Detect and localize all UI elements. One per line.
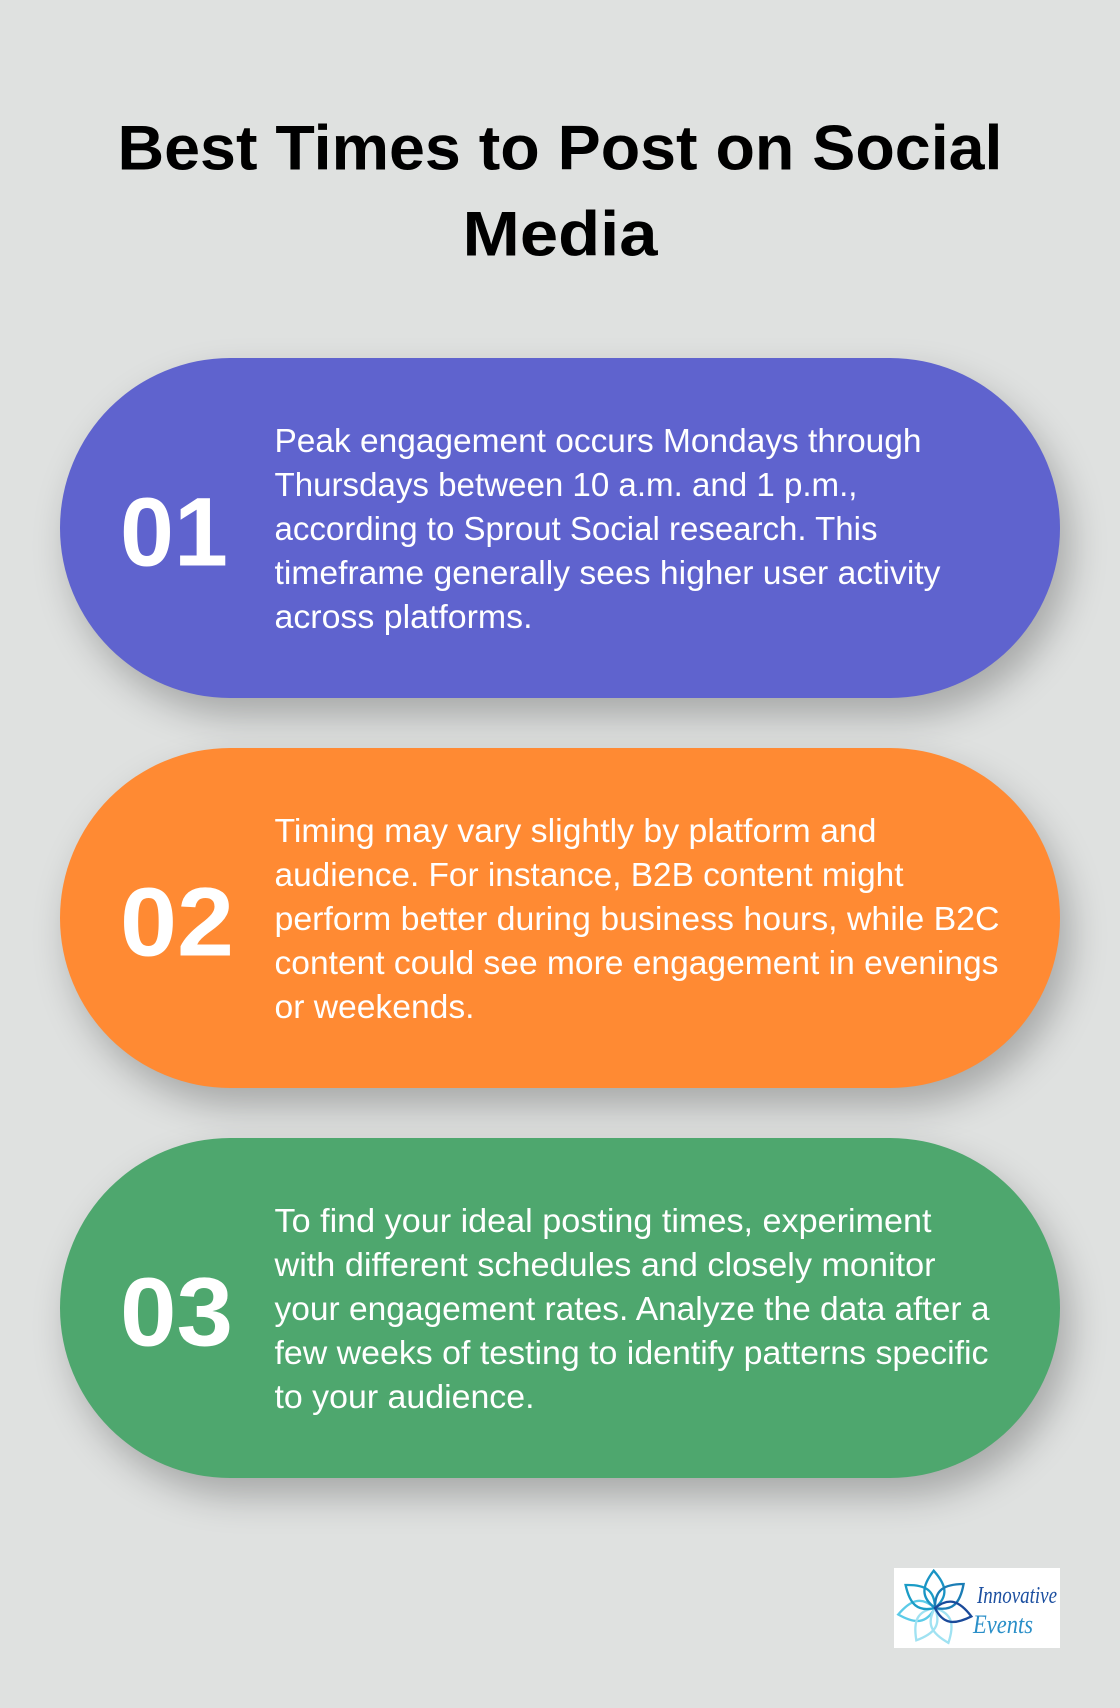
text block: step 03: To find your ideal posting times, experiment: [274, 1202, 932, 1239]
title: [118, 114, 1002, 270]
number 01: 01: [120, 478, 228, 586]
number 03: 03: [120, 1258, 233, 1366]
text block: step 01: Thursdays between 10 a.m. and 1 p.m.,: [274, 466, 858, 503]
text block: step 02: perform better during business hours, while B2C: [274, 900, 1000, 937]
text block: step 02: or weekends.: [274, 988, 474, 1025]
text block: step 03: few weeks of testing to identify patterns specific: [274, 1334, 988, 1371]
panel: step 01 peak engagement: [60, 358, 1060, 698]
text block: step 02: [274, 812, 1000, 1025]
icon: lotus flower: [897, 1570, 974, 1646]
logo wordmark: [972, 1583, 1057, 1639]
panel: step 03 find your ideal times: [60, 1138, 1060, 1478]
text block: step 02: Timing may vary slightly by platform and: [274, 812, 876, 849]
text block: step 03: [273, 1202, 990, 1415]
panel: step 02 timing varies: [60, 748, 1060, 1088]
text block: step 01: across platforms.: [274, 598, 532, 635]
logo: Innovative Events: [894, 1568, 1060, 1648]
title: Best Times to Post on Social: [118, 114, 1002, 184]
title: Media: [462, 200, 659, 270]
text block: step 01: [274, 422, 941, 635]
number 02: 02: [120, 868, 234, 976]
text block: step 01: Peak engagement occurs Mondays through: [274, 422, 922, 459]
text block: step 03: with different schedules and closely monitor: [273, 1246, 936, 1283]
text block: step 02: audience. For instance, B2B content might: [274, 856, 904, 893]
text block: step 03: to your audience.: [274, 1378, 534, 1415]
logo wordmark: Events: [972, 1610, 1033, 1639]
text block: step 01: timeframe generally sees higher user activity: [274, 554, 941, 591]
logo wordmark: Innovative: [976, 1583, 1057, 1609]
text block: step 01: according to Sprout Social research. This: [274, 510, 878, 547]
text block: step 02: content could see more engagement in evenings: [274, 944, 998, 981]
text block: step 03: your engagement rates. Analyze the data after a: [274, 1290, 990, 1327]
